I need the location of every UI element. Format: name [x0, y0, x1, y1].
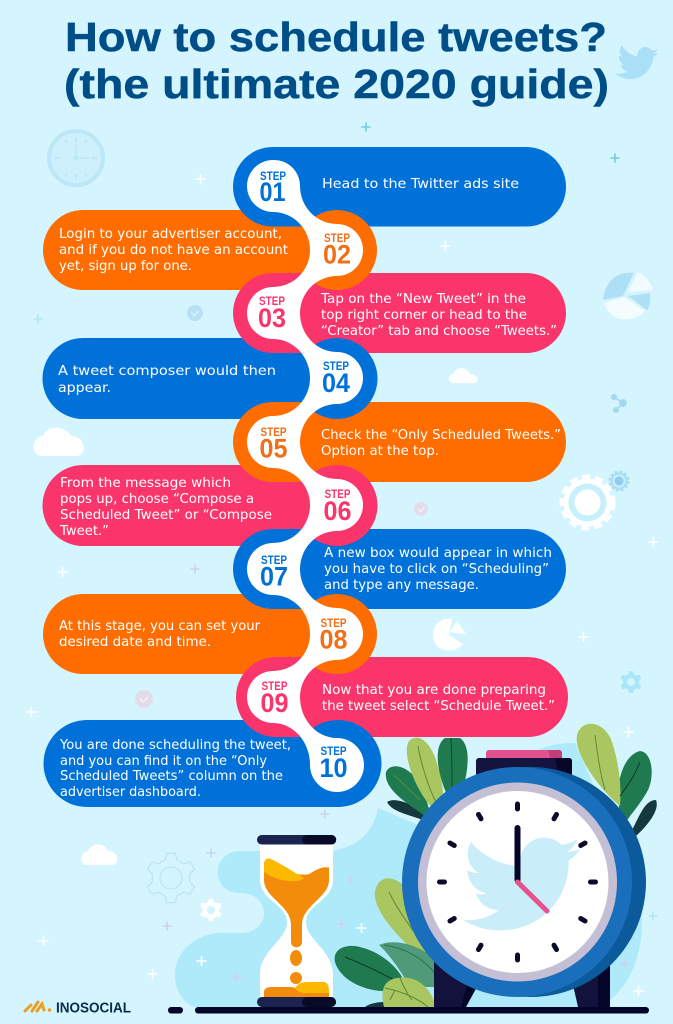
- step 07: A new box would appear in which: [324, 546, 552, 561]
- hourglass: [257, 835, 336, 1007]
- background blob: [175, 743, 642, 1007]
- step 04: 04: [322, 368, 350, 398]
- icon: network nodes: [612, 395, 626, 412]
- step 10: [59, 738, 347, 800]
- icon: pale check badge: [135, 690, 153, 708]
- icon: pie chart right: [603, 272, 653, 319]
- step 01: Head to the Twitter ads site: [322, 177, 519, 192]
- step 08: [59, 618, 348, 654]
- step 09: 09: [260, 688, 288, 718]
- step 02: [59, 227, 351, 274]
- step 03: STEP: [259, 296, 285, 308]
- icon: cloud lower left: [81, 844, 117, 865]
- step 04: STEP: [323, 361, 349, 373]
- step 06: STEP: [324, 489, 351, 501]
- step 09: [260, 681, 555, 718]
- ground line: [168, 1007, 649, 1014]
- step 09: Now that you are done preparing: [322, 683, 546, 698]
- step 10: Scheduled Tweets” column on the: [60, 769, 283, 784]
- icon: cloud left: [33, 428, 84, 456]
- step 06: Scheduled Tweet” or “Compose: [60, 508, 272, 523]
- step 07: STEP: [261, 555, 287, 567]
- step 04: A tweet composer would then: [58, 364, 276, 379]
- step 02: STEP: [324, 233, 350, 245]
- step 07: you have to click on “Scheduling”: [324, 562, 549, 577]
- white winding path: [247, 160, 364, 792]
- clock hands: [518, 828, 547, 911]
- step 06: pops up, choose “Compose a: [60, 492, 254, 507]
- step 10: You are done scheduling the tweet,: [59, 738, 291, 753]
- step 05: [260, 427, 561, 464]
- step 04: appear.: [58, 381, 111, 396]
- step 03: top right corner or head to the: [321, 308, 527, 323]
- alarm clock: [402, 750, 646, 1007]
- step 04: [58, 361, 350, 398]
- icon: white pie chart: [433, 619, 468, 650]
- icon: cloud middle: [449, 368, 478, 383]
- step 08: desired date and time.: [59, 635, 211, 650]
- step 01: STEP: [260, 171, 286, 183]
- clock ticks: [440, 804, 596, 960]
- title: How to schedule tweets?: [65, 14, 607, 60]
- icon: cyan gear: [621, 671, 641, 693]
- step 02: and if you do not have an account: [59, 243, 288, 258]
- step 05: STEP: [260, 427, 287, 439]
- icon: outline gear: [148, 853, 194, 903]
- logo: Inosocial: [25, 1000, 131, 1016]
- leaves behind clock: [335, 724, 657, 1007]
- title: [64, 14, 609, 107]
- step 03: [258, 292, 557, 339]
- step circles right of snake: [294, 210, 382, 807]
- step 06: 06: [324, 496, 352, 526]
- step 06: [59, 476, 351, 539]
- step 08: 08: [320, 624, 348, 654]
- icon: white gear: [200, 899, 222, 921]
- step 03: 03: [258, 303, 286, 333]
- icon: twitter bird on clock face: [463, 838, 581, 930]
- step 10: 10: [320, 753, 348, 783]
- logo: Inosocial: INOSOCIAL: [56, 1000, 131, 1016]
- step 05: Option at the top.: [321, 444, 439, 459]
- icon: twitter bird top right: [614, 43, 659, 83]
- step 02: yet, sign up for one.: [59, 259, 192, 274]
- icon: large white gear: [562, 476, 614, 528]
- left pill bodies: [42, 210, 341, 807]
- step 06: From the message which: [60, 476, 231, 491]
- icon: faint wall clock: [49, 131, 103, 185]
- step 02: 02: [323, 240, 351, 270]
- right pills: [233, 147, 568, 737]
- step 08: At this stage, you can set your: [59, 619, 260, 634]
- step 03: Tap on the “New Tweet” in the: [320, 292, 526, 307]
- step 05: 05: [260, 434, 288, 464]
- step 06: Tweet.”: [59, 524, 109, 539]
- step 10: advertiser dashboard.: [60, 785, 201, 800]
- step 10: and you can find it on the “Only: [60, 754, 267, 769]
- step 07: 07: [260, 562, 288, 592]
- step 07: [260, 546, 552, 593]
- icon: small blue gear: [610, 472, 628, 490]
- step 03: “Creator” tab and choose “Tweets.”: [321, 324, 557, 339]
- icon: blue check badge: [187, 305, 203, 321]
- step 10: STEP: [320, 746, 347, 758]
- step 07: and type any message.: [324, 578, 479, 593]
- step 02: Login to your advertiser account,: [59, 227, 282, 242]
- step 09: STEP: [262, 681, 288, 693]
- step 01: 01: [260, 177, 286, 207]
- step 05: Check the “Only Scheduled Tweets.”: [321, 428, 561, 443]
- step 01: [260, 171, 519, 207]
- decorative plus signs: [27, 123, 658, 996]
- icon: pink check badge: [414, 502, 428, 516]
- step 08: STEP: [320, 618, 347, 630]
- step 09: the tweet select “Schedule Tweet.”: [322, 699, 555, 714]
- title: (the ultimate 2020 guide): [64, 61, 609, 107]
